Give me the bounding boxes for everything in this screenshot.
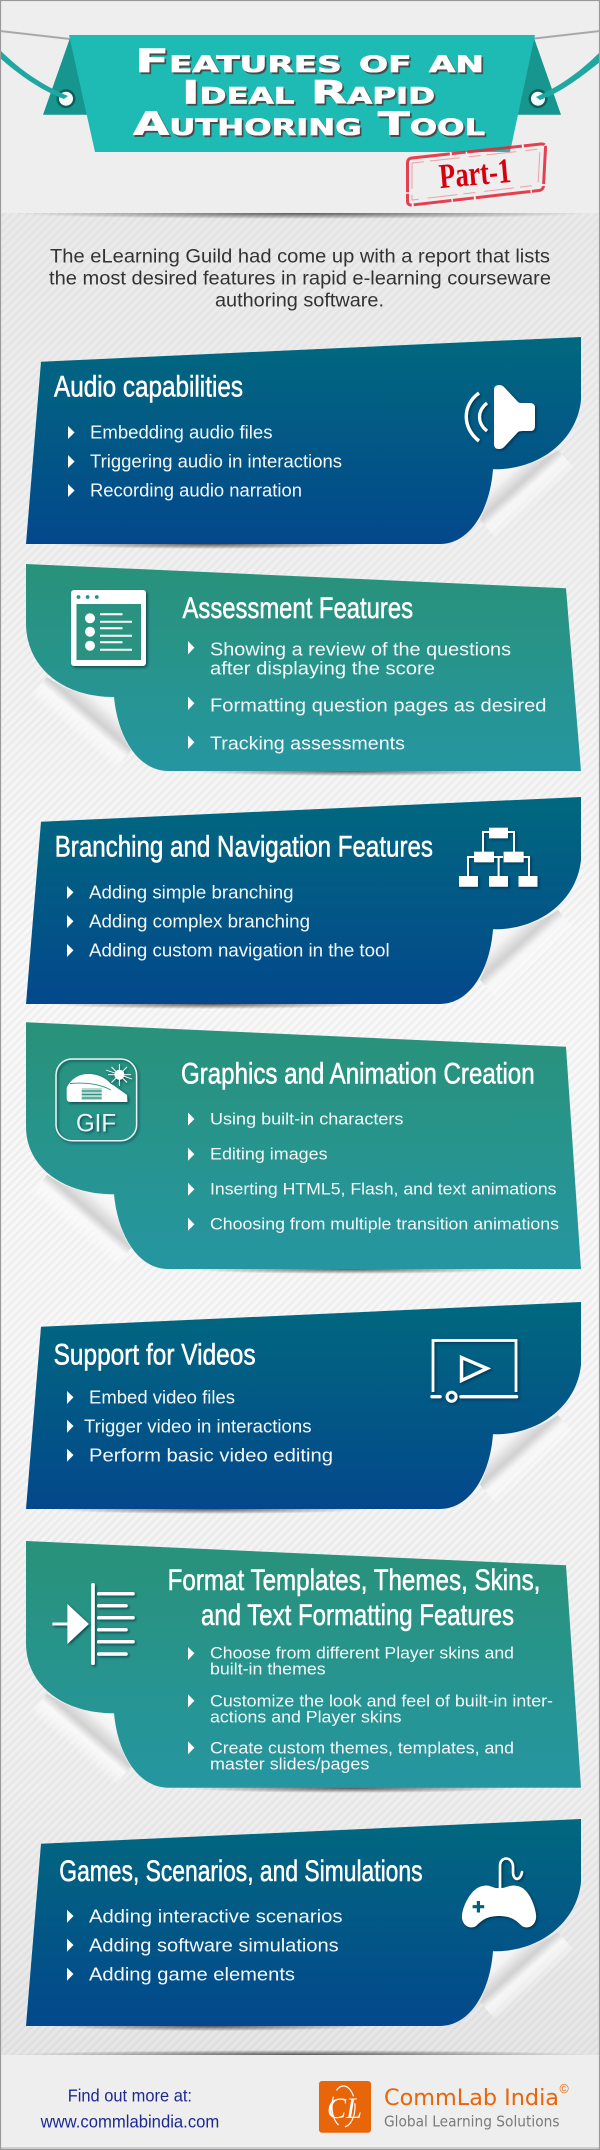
heading: and Text Formatting Features bbox=[201, 1599, 514, 1632]
intro text bbox=[49, 246, 551, 312]
heading: Branching and Navigation Features bbox=[55, 831, 433, 864]
banner main bbox=[69, 35, 535, 152]
hanging strings bbox=[0, 31, 600, 39]
bullet list: built-in themes bbox=[210, 1661, 326, 1679]
panel: graphics and animation bbox=[26, 1022, 581, 1274]
left ribbon bbox=[0, 50, 68, 99]
icon: text indent arrow bbox=[52, 1583, 133, 1665]
intro text: the most desired features in rapid e-learning courseware bbox=[49, 267, 551, 289]
bullet list bbox=[188, 1645, 553, 1774]
right banner flap bbox=[515, 38, 561, 115]
title: Ideal Rapid bbox=[182, 74, 435, 112]
bullet list bbox=[67, 1905, 342, 1984]
bullet list: Choosing from multiple transition animations bbox=[210, 1215, 559, 1233]
top header background bbox=[0, 0, 600, 219]
bullet list bbox=[188, 639, 546, 754]
bullet list: Editing images bbox=[210, 1145, 328, 1163]
icon: GIF image: GIF bbox=[76, 1110, 116, 1138]
left eyelet hole bbox=[59, 92, 73, 106]
bullet list: Adding game elements bbox=[89, 1963, 295, 1984]
CommLab India logo bbox=[319, 2081, 371, 2133]
CommLab India logo: CL bbox=[327, 2092, 362, 2125]
right eyelet bbox=[528, 89, 548, 108]
right eyelet hole bbox=[531, 92, 545, 106]
bullet list: Inserting HTML5, Flash, and text animations bbox=[210, 1180, 556, 1198]
icon: GIF image bbox=[56, 1059, 137, 1141]
find out more text: www.commlabindia.com bbox=[40, 2111, 219, 2131]
icon: hierarchy bbox=[459, 828, 538, 887]
title: Features of an bbox=[135, 42, 484, 80]
footer bbox=[0, 2055, 600, 2150]
intro text: The eLearning Guild had come up with a report that lists bbox=[50, 246, 550, 268]
heading: Audio capabilities bbox=[54, 371, 243, 404]
bullet list: Adding custom navigation in the tool bbox=[89, 941, 390, 961]
bullet list: Showing a review of the questions bbox=[210, 639, 511, 660]
stamp: Part-1: Part-1 bbox=[437, 151, 513, 196]
bullet list: Create custom themes, templates, and bbox=[210, 1740, 514, 1758]
right ribbon bbox=[536, 52, 600, 100]
bullet list: Recording audio narration bbox=[90, 481, 302, 501]
title: Authoring Tool bbox=[133, 105, 485, 143]
copyright mark: © bbox=[560, 2082, 570, 2096]
bullet list: master slides/pages bbox=[210, 1756, 369, 1774]
title bbox=[133, 42, 485, 143]
bullet list: after displaying the score bbox=[210, 657, 435, 678]
panel: format templates and themes bbox=[26, 1541, 581, 1793]
find out more text bbox=[40, 2086, 219, 2131]
bullet list: Embed video files bbox=[89, 1387, 235, 1407]
icon: assessment window bbox=[71, 590, 146, 666]
heading: Support for Videos bbox=[54, 1338, 256, 1371]
left eyelet bbox=[56, 89, 76, 108]
tagline: Global Learning Solutions bbox=[384, 2113, 560, 2131]
panel: assessment features bbox=[26, 564, 581, 776]
panel: audio capabilities bbox=[26, 337, 581, 549]
bullet list: Formatting question pages as desired bbox=[210, 695, 546, 716]
banner bbox=[0, 31, 600, 152]
heading bbox=[168, 1564, 540, 1632]
left banner flap bbox=[43, 38, 90, 115]
bullet list: Adding software simulations bbox=[89, 1934, 339, 1955]
bullet list bbox=[67, 882, 390, 961]
bullet list: Trigger video in interactions bbox=[84, 1416, 312, 1436]
bullet list: Customize the look and feel of built-in inter- bbox=[210, 1693, 553, 1711]
bullet list bbox=[67, 1387, 333, 1465]
heading: Assessment Features bbox=[182, 592, 413, 625]
bullet list bbox=[188, 1110, 559, 1233]
bullet list: Triggering audio in interactions bbox=[90, 451, 342, 471]
bullet list: actions and Player skins bbox=[210, 1709, 402, 1727]
heading: Games, Scenarios, and Simulations bbox=[59, 1855, 423, 1888]
icon: speaker bbox=[466, 385, 535, 449]
stamp: Part-1 bbox=[408, 144, 546, 205]
icon: game controller bbox=[462, 1858, 536, 1927]
intro text: authoring software. bbox=[215, 290, 384, 312]
panel: branching and navigation bbox=[26, 797, 581, 1009]
CommLab India wordmark: CommLab India bbox=[384, 2085, 559, 2111]
bullet list: Adding interactive scenarios bbox=[89, 1905, 342, 1926]
bullet list bbox=[68, 422, 342, 501]
bullet list: Adding complex branching bbox=[89, 911, 310, 931]
bullet list: Embedding audio files bbox=[90, 422, 272, 442]
panel: support for videos bbox=[26, 1302, 581, 1514]
bullet list: Using built-in characters bbox=[210, 1110, 403, 1128]
bullet list: Perform basic video editing bbox=[89, 1445, 333, 1465]
bullet list: Adding simple branching bbox=[89, 882, 294, 902]
find out more text: Find out more at: bbox=[68, 2086, 192, 2106]
icon: video player bbox=[432, 1340, 516, 1401]
panel: games, scenarios, simulations bbox=[26, 1819, 581, 2031]
bullet list: Choose from different Player skins and bbox=[210, 1645, 514, 1663]
footer shadow bbox=[10, 2050, 590, 2060]
bullet list: Tracking assessments bbox=[210, 733, 405, 754]
